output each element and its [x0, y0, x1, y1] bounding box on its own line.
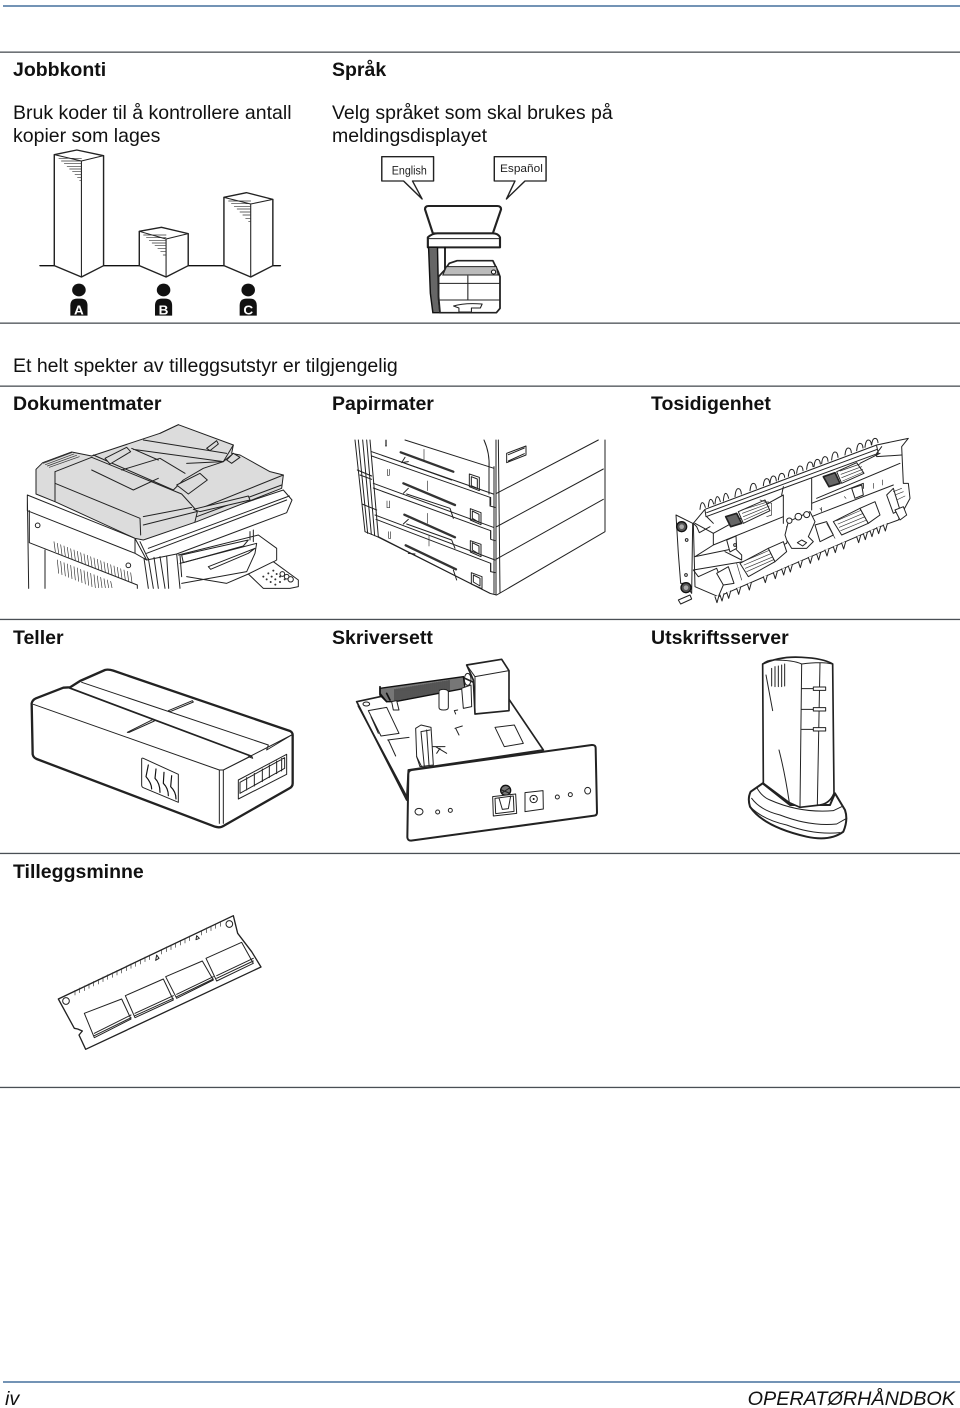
bar B — [139, 227, 188, 277]
document feeder — [36, 425, 283, 540]
front panel — [407, 745, 597, 841]
stand — [749, 783, 847, 838]
paper guide clips — [726, 463, 864, 527]
callout: English — [382, 157, 434, 199]
heading: Et helt spekter av tilleggsutstyr: Et helt spekter av tilleggsutstyr er tilgjengelig — [13, 355, 398, 377]
heading: Utskriftsserver: Utskriftsserver — [651, 627, 789, 649]
panel: Papirmater — [332, 393, 605, 595]
illustration: printer kit board — [357, 659, 597, 841]
icon: user C: C — [243, 303, 254, 318]
icon: copier — [425, 206, 501, 313]
icon: user A: A — [74, 303, 84, 318]
bottom teeth — [715, 524, 887, 603]
heading: Jobbkonti: Jobbkonti — [13, 59, 106, 81]
text block: Jobbkonti description: kopier som lages — [13, 125, 161, 147]
text block: Språk description: Velg språket som skal brukes på — [332, 102, 613, 124]
panel: Utskriftsserver — [651, 627, 847, 838]
panel: Jobbkonti — [13, 59, 292, 318]
side plate and knobs — [676, 515, 693, 604]
heading: Dokumentmater: Dokumentmater — [13, 393, 162, 415]
illustration: key counter — [32, 670, 293, 827]
callout: English: English — [392, 164, 427, 177]
main chassis — [693, 438, 910, 597]
heading: Papirmater: Papirmater — [332, 393, 434, 415]
panel: Skriversett — [332, 627, 597, 841]
heading: Tilleggsminne: Tilleggsminne — [13, 861, 144, 883]
panel: Språk — [332, 58, 613, 313]
illustration: duplex unit — [676, 438, 910, 604]
bar A — [54, 150, 104, 277]
panel: Tilleggsminne — [13, 861, 261, 1049]
illustration: print server tower — [749, 657, 847, 838]
circuit board — [357, 678, 543, 800]
heading: Skriversett: Skriversett — [332, 627, 433, 649]
panel: Dokumentmater — [13, 393, 298, 588]
icon: user B — [155, 284, 172, 318]
callout: Español: Español — [500, 162, 543, 175]
illustration: language bubbles and copier — [382, 157, 546, 313]
heading: Teller: Teller — [13, 627, 64, 649]
icon: user C — [240, 284, 257, 318]
bar C — [224, 193, 273, 277]
cassette handles — [401, 452, 457, 580]
rollers — [717, 488, 907, 585]
icon: user A — [70, 284, 87, 318]
cassette latches — [385, 440, 482, 589]
panel: Teller — [13, 627, 293, 827]
illustration: paper cassette stack — [355, 440, 605, 595]
text block: Jobbkonti description: Bruk koder til å kontrollere antall — [13, 102, 292, 124]
text block: Språk description: meldingsdisplayet — [332, 125, 488, 147]
chart: copy volume per user A, B, C — [40, 150, 280, 318]
connector and capacitor — [380, 659, 509, 714]
icon: user B: B — [159, 303, 168, 318]
callout: Español — [494, 157, 546, 199]
heading: Tosidigenhet: Tosidigenhet — [651, 393, 771, 415]
illustration: document feeder on copier — [27, 425, 298, 588]
footer — [5, 1387, 956, 1408]
heading: Språk: Språk — [332, 58, 386, 81]
panel: Tosidigenhet — [651, 393, 910, 604]
tower body — [763, 657, 834, 807]
illustration: memory module — [58, 916, 261, 1049]
top teeth — [700, 438, 878, 509]
